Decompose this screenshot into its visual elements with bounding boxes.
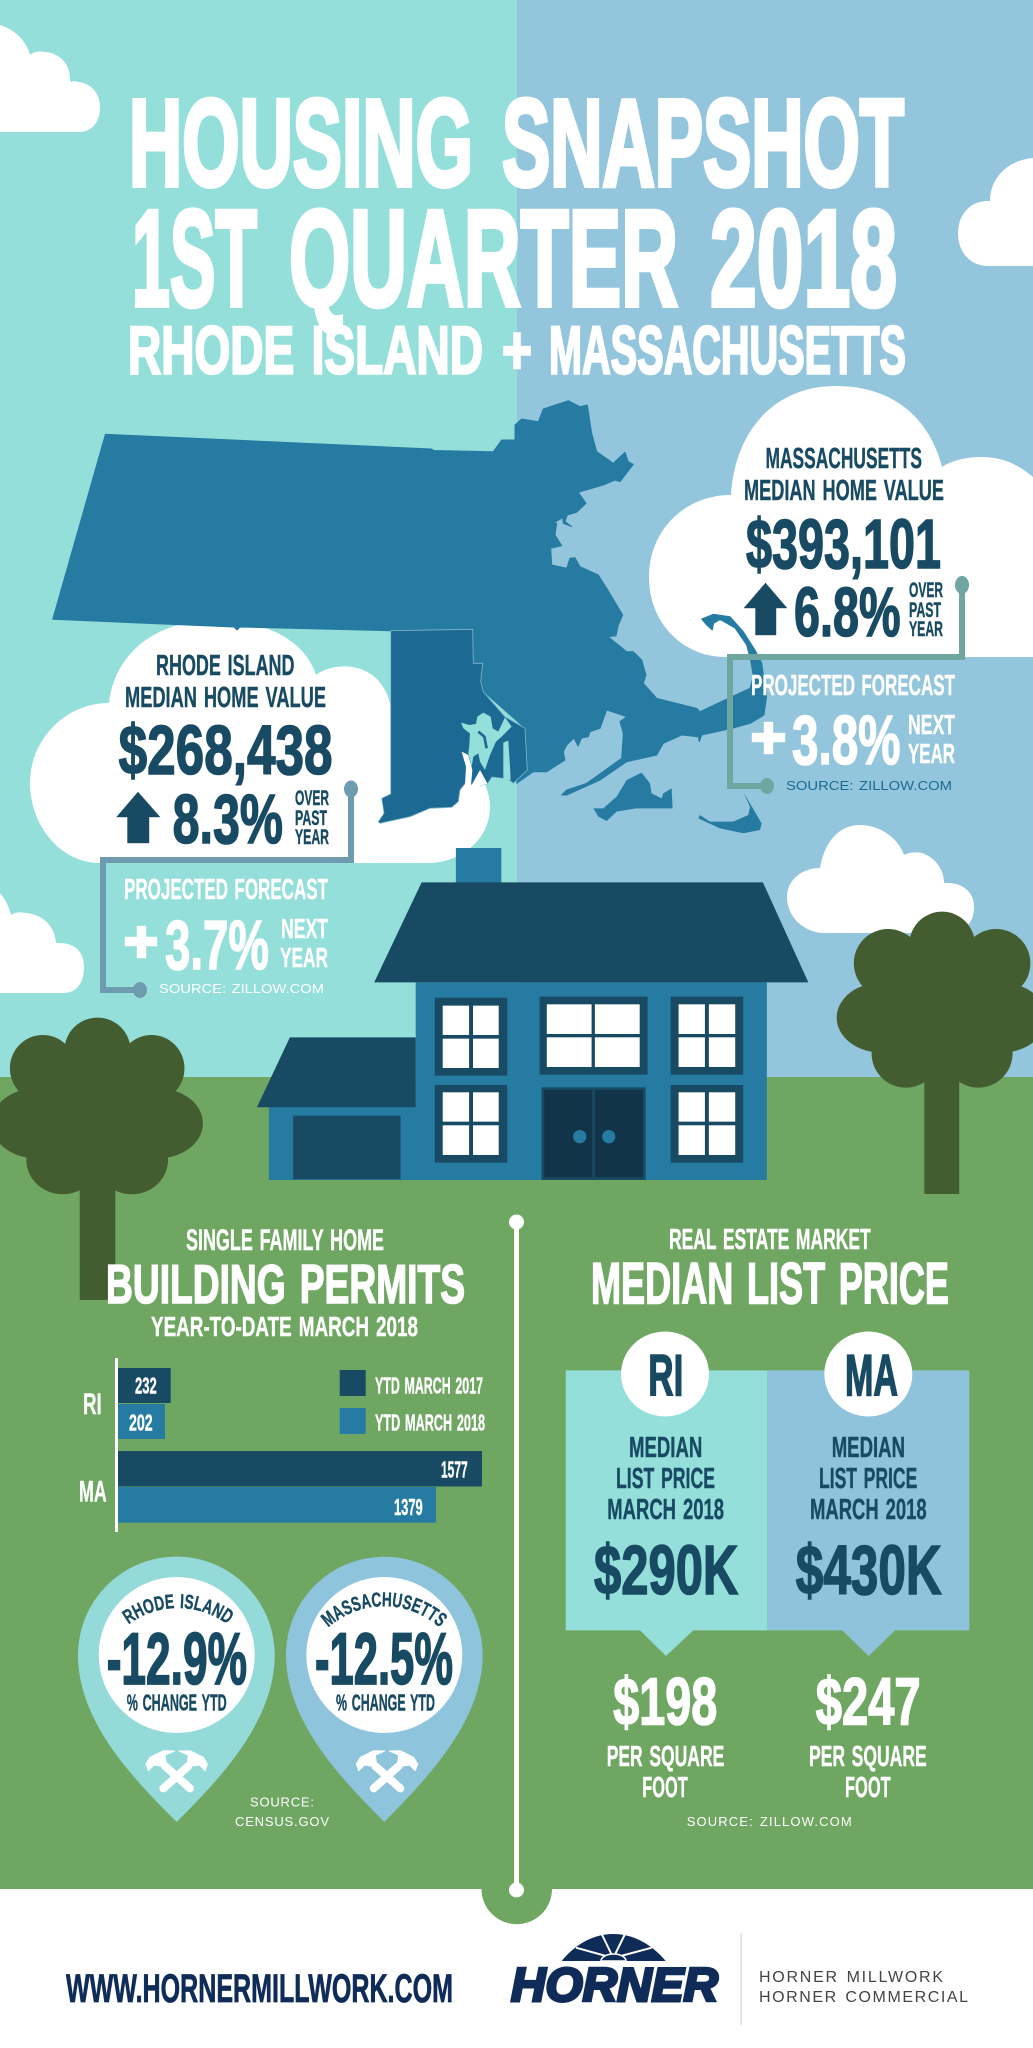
panel: Rhode Island forecast — [124, 874, 328, 984]
over past year: PAST — [295, 807, 327, 830]
list price label — [810, 1432, 927, 1526]
badge MA: MA — [845, 1344, 898, 1409]
bar: RI 2018: 202 — [129, 1410, 153, 1436]
over past year — [909, 579, 943, 641]
window lower left — [435, 1085, 507, 1163]
source: census: SOURCE: — [250, 1795, 314, 1810]
front door — [542, 1087, 646, 1180]
panel: MA list price — [767, 1332, 969, 1656]
source: census — [235, 1795, 329, 1829]
window lower right — [671, 1085, 743, 1163]
badge MA — [824, 1332, 912, 1416]
tree left — [0, 1018, 203, 1300]
garage door — [293, 1116, 401, 1179]
icon: up arrow — [117, 792, 160, 843]
next year: YEAR — [280, 942, 328, 973]
source: Massachusetts: SOURCE: ZILLOW.COM — [786, 778, 952, 793]
next year: NEXT — [281, 913, 328, 944]
bar: RI 2018 — [118, 1404, 165, 1439]
footer background — [0, 1889, 1033, 2048]
title — [128, 74, 906, 389]
footer notch — [482, 1889, 552, 1924]
source: list price: SOURCE: ZILLOW.COM — [687, 1814, 852, 1829]
per square foot label: PER SQUARE — [607, 1741, 724, 1773]
forecast heading: PROJECTED FORECAST — [124, 874, 328, 906]
footer company names: HORNER MILLWORK — [759, 1969, 943, 1986]
bar: RI 2017 — [118, 1368, 171, 1403]
price per foot: $247 — [816, 1664, 921, 1740]
panel: RI list price — [566, 1332, 767, 1656]
tree right — [837, 912, 1033, 1194]
heading: building permits — [106, 1224, 465, 1342]
house — [257, 848, 808, 1180]
forecast value: 3.8% — [792, 701, 900, 779]
arc label: MASSACHUSETTS — [320, 1592, 447, 1628]
cloud lower right — [787, 825, 974, 933]
icon: crossed hammers — [356, 1751, 418, 1788]
source: census: CENSUS.GOV — [235, 1814, 329, 1829]
heading: median list price — [591, 1224, 949, 1317]
panel: Massachusetts median home value — [744, 443, 944, 651]
per square foot: MA — [809, 1664, 927, 1804]
over past year: YEAR — [295, 826, 329, 849]
icon: crossed hammers — [146, 1751, 207, 1788]
window upper left — [435, 998, 507, 1076]
connector line: Massachusetts — [730, 576, 969, 794]
next year: YEAR — [908, 738, 955, 769]
legend 2018 — [340, 1408, 485, 1436]
source: Rhode Island: SOURCE: ZILLOW.COM — [159, 981, 324, 996]
arc label — [121, 1594, 233, 1624]
window upper centre — [540, 997, 648, 1075]
bar: MA 2017 — [118, 1451, 482, 1486]
change label: % CHANGE YTD — [127, 1690, 227, 1716]
panel background — [767, 1370, 969, 1656]
list price value: $430K — [796, 1531, 942, 1609]
map: Martha's Vineyard — [593, 773, 673, 821]
logo fan — [562, 1934, 666, 1961]
heading: RHODE ISLAND — [156, 650, 294, 682]
pin shape — [286, 1557, 483, 1822]
title line 2: 2018 — [710, 182, 897, 336]
per square foot label — [809, 1741, 927, 1804]
axis label MA: MA — [79, 1475, 107, 1508]
footer separator — [740, 1933, 742, 2025]
per square foot label: FOOT — [845, 1772, 891, 1804]
bar: RI 2017: 232 — [135, 1372, 157, 1398]
list price value: $290K — [594, 1531, 738, 1609]
badge RI: RI — [648, 1344, 683, 1409]
heading line 1: SINGLE FAMILY HOME — [186, 1224, 384, 1257]
cloud lower left — [0, 893, 84, 993]
pin: Massachusetts — [286, 1556, 483, 1822]
title line 3: RHODE ISLAND — [128, 313, 483, 389]
pin circle — [306, 1577, 462, 1733]
title line 1: HOUSING — [129, 74, 473, 212]
legend 2017 — [340, 1370, 483, 1398]
price per foot: $198 — [613, 1664, 717, 1740]
cloud behind Massachusetts stats — [649, 386, 1033, 657]
change: 6.8% — [794, 573, 900, 651]
map: Massachusetts — [53, 401, 766, 795]
plus sign — [752, 722, 785, 754]
list price label — [607, 1432, 724, 1526]
sky background right — [517, 0, 1033, 1078]
legend 2018: YTD MARCH 2018 — [375, 1410, 485, 1436]
cloud behind Rhode Island stats — [30, 620, 490, 863]
main roof — [374, 882, 808, 982]
logo wordmark: HORNER — [511, 1958, 718, 2011]
icon: up arrow — [744, 583, 787, 635]
next year: NEXT — [908, 709, 955, 740]
list price label: MEDIAN — [629, 1432, 702, 1464]
over past year: OVER — [909, 579, 943, 602]
map: Massachusetts and Rhode Island — [53, 401, 766, 833]
title line 3: + — [502, 313, 532, 389]
garage roof — [257, 1037, 416, 1107]
pin shape — [78, 1557, 275, 1822]
window upper right — [671, 997, 743, 1075]
house body — [269, 982, 767, 1180]
legend 2017: YTD MARCH 2017 — [375, 1372, 483, 1398]
axis label RI: RI — [83, 1388, 102, 1421]
percent change: -12.5% — [315, 1619, 453, 1700]
panel: Rhode Island median home value — [117, 650, 333, 858]
bar: MA 2018 — [118, 1487, 436, 1523]
over past year: YEAR — [909, 618, 943, 641]
centre divider — [509, 1214, 524, 1890]
plus sign — [125, 926, 157, 958]
badge RI — [621, 1332, 709, 1416]
forecast value: 3.7% — [165, 906, 269, 984]
list price label: MEDIAN — [832, 1432, 905, 1464]
list price label: LIST PRICE — [819, 1463, 917, 1495]
bar: MA 2018: 1379 — [394, 1494, 423, 1520]
chimney — [456, 848, 501, 885]
value: $393,101 — [746, 505, 941, 583]
logo: Horner — [511, 1934, 718, 2011]
chart axis — [115, 1358, 118, 1532]
sky background left — [0, 0, 517, 1078]
change label: % CHANGE YTD — [336, 1690, 435, 1716]
value: $268,438 — [119, 711, 333, 789]
cloud top right — [958, 158, 1033, 266]
bar chart — [79, 1358, 485, 1532]
heading line 1: REAL ESTATE MARKET — [669, 1224, 871, 1256]
list price label: MARCH 2018 — [607, 1494, 724, 1526]
arc label: RHODE ISLAND — [121, 1594, 233, 1624]
footer company names — [759, 1969, 968, 2006]
map: Nantucket — [698, 792, 762, 833]
bar: MA 2017: 1577 — [441, 1456, 468, 1482]
map: Rhode Island — [378, 629, 527, 823]
pin: Rhode Island — [78, 1556, 275, 1822]
title line 3 — [128, 313, 906, 389]
list price label: MARCH 2018 — [810, 1494, 927, 1526]
map: Narragansett Bay — [461, 713, 512, 786]
footer company names: HORNER COMMERCIAL — [759, 1989, 968, 2006]
divider end dot — [509, 1882, 524, 1898]
change: 8.3% — [173, 780, 283, 858]
heading line 3: YEAR-TO-DATE MARCH 2018 — [151, 1311, 418, 1342]
ground — [0, 1077, 1033, 1889]
percent change: -12.9% — [107, 1619, 247, 1700]
heading: MASSACHUSETTS — [766, 443, 922, 475]
per square foot label: FOOT — [642, 1772, 688, 1804]
heading line 2: MEDIAN HOME VALUE — [125, 682, 326, 714]
connector line: Rhode Island — [103, 780, 358, 998]
title line 2: QUARTER — [289, 182, 678, 336]
pin circle — [99, 1577, 255, 1733]
next year — [280, 913, 328, 973]
title line 2: 1ST — [132, 182, 257, 336]
panel: Massachusetts forecast — [751, 670, 955, 779]
per square foot label — [607, 1741, 724, 1804]
over past year: PAST — [909, 599, 941, 622]
over past year: OVER — [295, 787, 329, 810]
next year — [908, 709, 955, 769]
over past year — [295, 787, 329, 849]
panel background — [566, 1370, 767, 1656]
per square foot: RI — [607, 1664, 724, 1804]
list price label: LIST PRICE — [616, 1463, 715, 1495]
footer url: WWW.HORNERMILLWORK.COM — [66, 1967, 453, 2011]
cloud top left — [0, 25, 100, 132]
per square foot label: PER SQUARE — [809, 1741, 927, 1773]
heading line 2: BUILDING PERMITS — [106, 1254, 465, 1315]
